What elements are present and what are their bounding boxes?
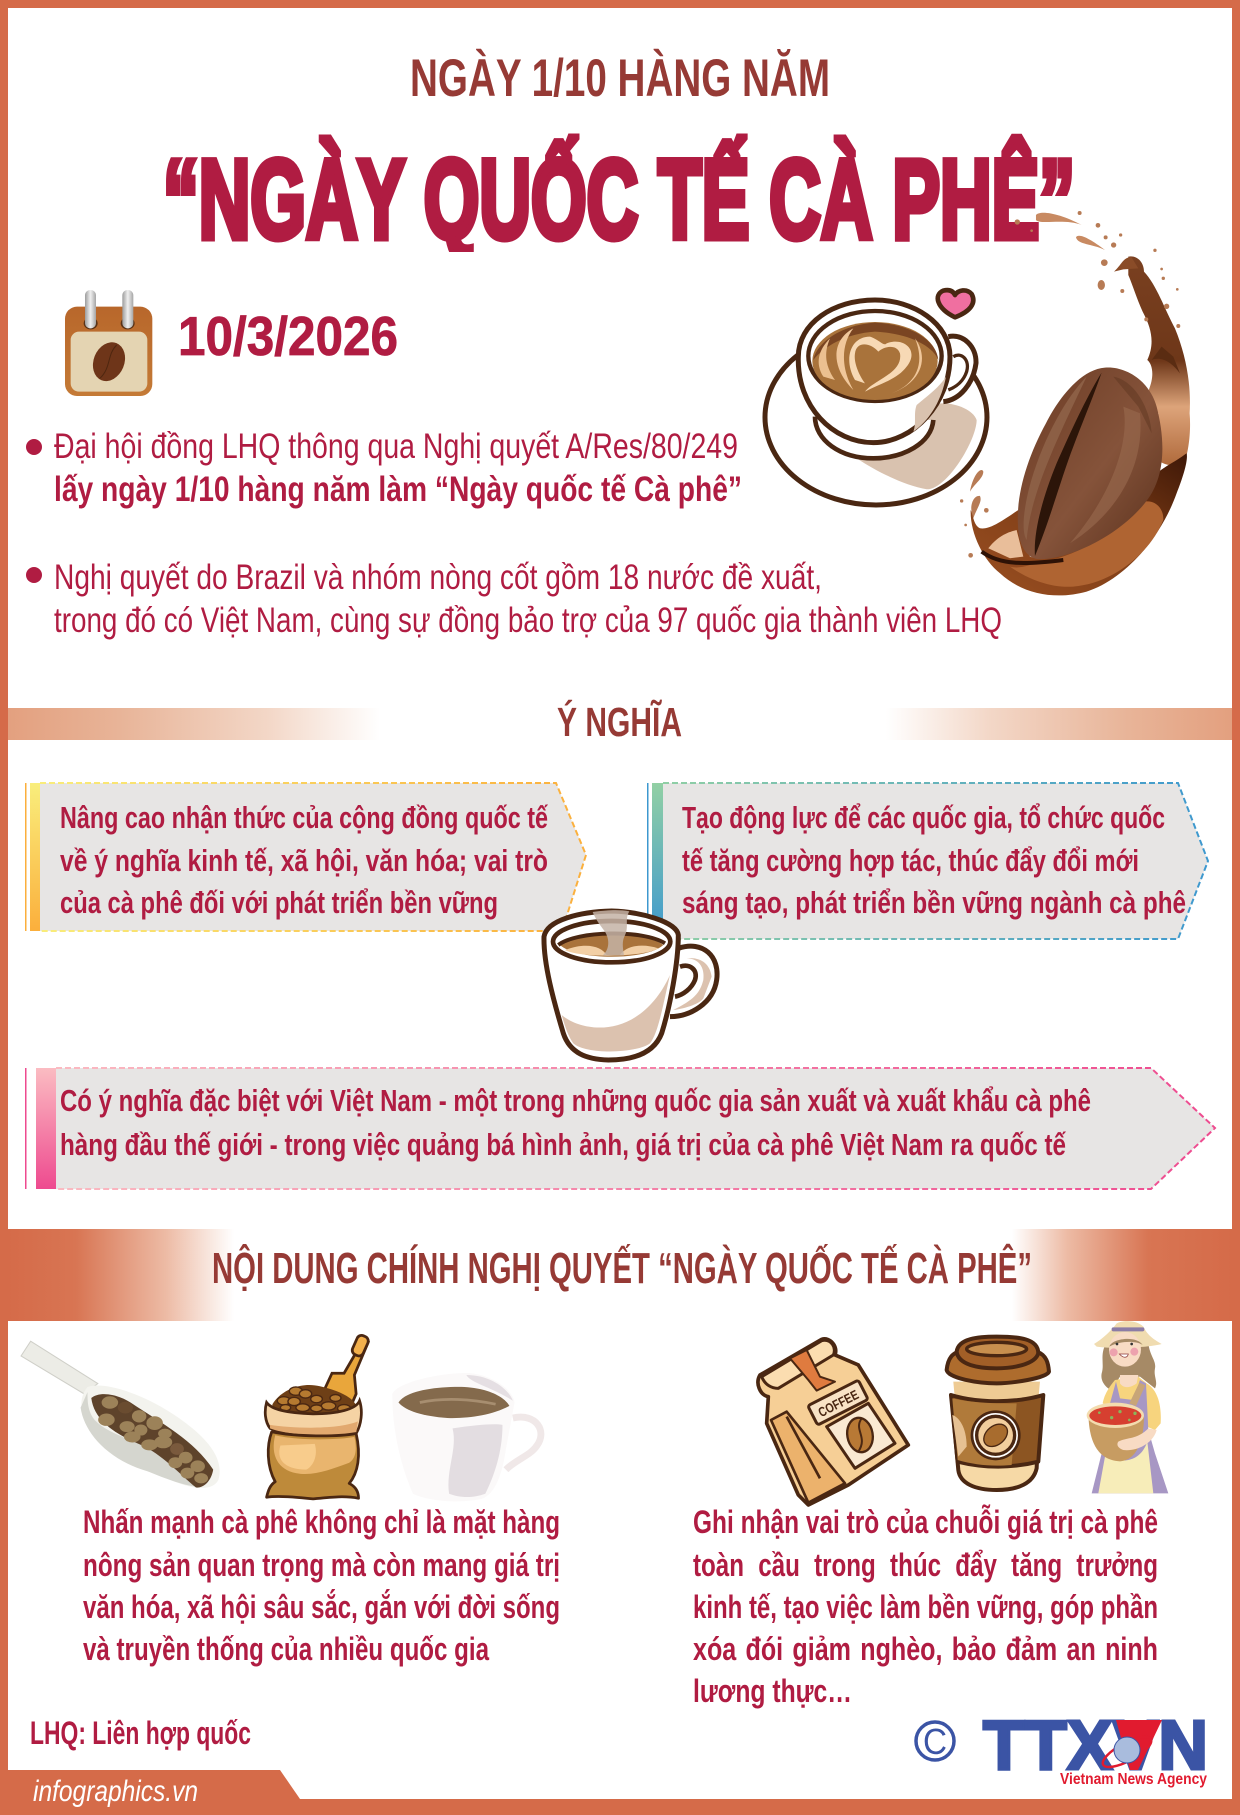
footnote: LHQ: Liên hợp quốc [30,1715,251,1751]
bullet 1: lấy ngày 1/10 hàng năm làm “Ngày quốc tế Cà phê” [54,470,742,509]
section band: y nghia: Ý NGHĨA [557,699,682,745]
illustration: watercolor white mug [392,1373,541,1501]
panel: meaning 1: của cà phê đối với phát triển bền vững [60,885,498,920]
logo: copyright and TTXVN: TTXVN [983,1706,1208,1784]
bullet 1: Đại hội đồng LHQ thông qua Nghị quyết A/Res/80/249 [54,427,738,466]
date: 10/3/2026 [178,305,398,367]
bullet 2 [26,558,1002,640]
illustration: takeaway cup [947,1337,1049,1490]
illustration: coffee sack with scoop [265,1334,370,1499]
logo: copyright and TTXVN: Vietnam News Agency [1060,1771,1207,1788]
text: main point right [693,1504,1158,1709]
illustration: coffee farmer woman [1087,1321,1168,1493]
title: date line: NGÀY 1/10 HÀNG NĂM [410,48,830,108]
text: main point right: lương thực… [693,1673,852,1709]
panel: meaning 1: Nâng cao nhận thức của cộng đồng quốc tế [60,800,549,835]
icon: calendar with coffee bean [65,290,152,396]
illustration: coffee bag [758,1339,908,1505]
logo: copyright and TTXVN: C [923,1721,947,1762]
panel: meaning 3 [25,1068,1215,1189]
text: main point left: Nhấn mạnh cà phê không chỉ là mặt hàng [83,1504,560,1540]
section band: y nghia [8,699,1232,745]
text: main point left: văn hóa, xã hội sâu sắc, gắn với đời sống [83,1589,560,1625]
icon: pink heart [938,290,973,317]
footer tab: infographics.vn [33,1775,198,1808]
illustration: latte cup on saucer [765,290,987,505]
bullet 2: Nghị quyết do Brazil và nhóm nòng cốt gồm 18 nước đề xuất, [54,558,822,597]
illustration: coffee bag: COFFEE [816,1387,861,1420]
illustration: coffee bean with splash [960,211,1190,595]
panel: meaning 1 [25,783,586,931]
text: main point left: nông sản quan trọng mà còn mang giá trị [83,1547,560,1583]
text: main point left: và truyền thống của nhiều quốc gia [83,1631,489,1667]
illustration: center coffee cup [544,910,717,1060]
panel: meaning 2 [647,783,1208,939]
footer tab [8,1770,300,1808]
bullet 2: trong đó có Việt Nam, cùng sự đồng bảo trợ của 97 quốc gia thành viên LHQ [54,601,1002,640]
text: main point left [83,1504,560,1667]
illustration: metal scoop of beans [21,1341,220,1488]
bullet 1 [26,427,742,509]
section band: main content [8,1229,1232,1321]
panel: meaning 1: về ý nghĩa kinh tế, xã hội, văn hóa; vai trò [60,843,548,878]
